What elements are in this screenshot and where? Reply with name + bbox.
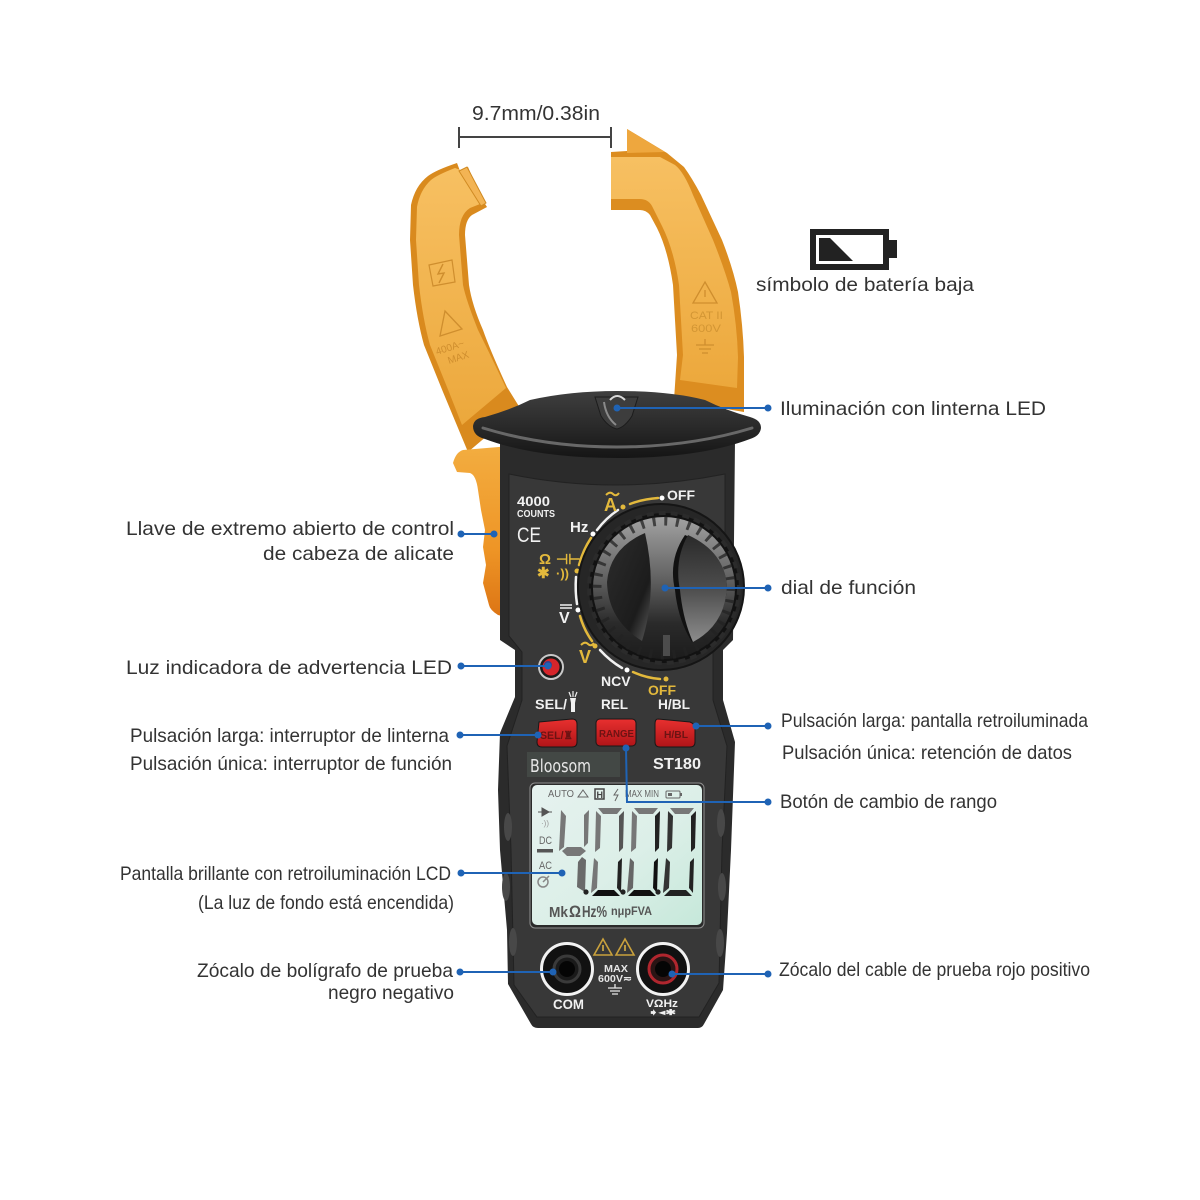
callout: negative socket: negro negativo: [328, 982, 454, 1004]
button: RANGE: RANGE: [599, 728, 634, 740]
button: H/BL: [655, 719, 695, 747]
LCD side indicators: ·)): [541, 819, 549, 828]
dial scale: OFF: [667, 487, 695, 503]
COM socket: COM: [553, 996, 584, 1012]
right clamp jaw: [611, 129, 744, 412]
button labels: REL: [601, 696, 628, 712]
callout: function dial: [662, 577, 916, 599]
LCD units row: [549, 902, 652, 921]
digit 0 third: [627, 808, 660, 896]
meter body: [498, 440, 735, 1028]
digit 0 fourth: [663, 808, 696, 896]
LCD side indicators: DC: [539, 835, 552, 847]
dial scale: Ω: [539, 551, 551, 568]
callout: clamp lever: [126, 518, 498, 565]
LCD status row: H: [596, 790, 603, 800]
callout: LCD screen: [120, 863, 566, 914]
callout: SEL button: Pulsación larga: interruptor de linterna: [130, 725, 449, 747]
callout: range button: [622, 744, 997, 813]
COM socket: [542, 944, 592, 1012]
dimension: jaw opening: [459, 103, 611, 148]
dial scale: OFF: [648, 682, 676, 698]
callout: SEL button: [130, 725, 542, 775]
brand plate: [527, 752, 620, 777]
button: RANGE: [596, 719, 636, 746]
LCD side indicators: AC: [539, 860, 552, 872]
LCD screen: [530, 783, 704, 928]
LCD side indicators: [537, 808, 553, 887]
callout: H/BL button: Pulsación única: retención de datos: [782, 742, 1072, 764]
LCD units row: Mk: [549, 904, 569, 921]
LCD digits 4.000: [559, 808, 696, 896]
jaw marking: 400A max: 400A~: [435, 338, 466, 358]
dial left grip: [607, 533, 651, 641]
left clamp jaw: [410, 163, 520, 452]
dial scale: A: [604, 495, 617, 515]
4000 counts label: [517, 493, 555, 520]
jaw marking: CAT II 600V: CAT II: [690, 310, 723, 322]
max voltage label: 600V≂: [598, 973, 632, 985]
dial scale: ·)): [556, 566, 569, 581]
jaw marking: 400A max: MAX: [447, 350, 471, 367]
label: low battery symbol: símbolo de batería baja: [756, 274, 974, 296]
dial scale: ⊣⊢: [556, 551, 580, 567]
dial scale: V: [579, 647, 591, 667]
jaw marking: lightning: [429, 260, 455, 286]
callout: SEL button: Pulsación única: interruptor de función: [130, 753, 452, 775]
positive socket: VΩHz: [646, 998, 679, 1010]
4000 counts label: COUNTS: [517, 509, 555, 520]
dial scale: NCV: [601, 673, 631, 689]
jaw marking: CAT II 600V: [690, 310, 723, 335]
callout: positive socket: [668, 959, 1090, 981]
jaw marking: 400A max: [435, 311, 471, 367]
digit 0 second: [591, 808, 624, 896]
LED flashlight: [595, 396, 638, 429]
callout: range button: Botón de cambio de rango: [780, 791, 997, 813]
dial scale: V: [559, 610, 570, 627]
button: H/BL: H/BL: [664, 729, 689, 741]
warning LED: [539, 655, 563, 679]
callout: warning LED: Luz indicadora de advertencia LED: [126, 657, 452, 679]
positive socket: ➧◂✱: [648, 1008, 676, 1017]
button: SEL flashlight: [537, 719, 577, 747]
callout: LCD screen: Pantalla brillante con retroiluminación LCD: [120, 863, 451, 885]
positive socket: [638, 944, 688, 1017]
callout: positive socket: Zócalo del cable de prueba rojo positivo: [779, 959, 1090, 981]
rear trigger grip: [453, 446, 510, 618]
callout: negative socket: Zócalo de bolígrafo de prueba: [197, 960, 453, 982]
CE mark: CE: [517, 524, 541, 547]
callout: LCD screen: (La luz de fondo está encendida): [198, 892, 454, 914]
LCD units row: nμpFVA: [611, 904, 652, 918]
dial scale: Hz: [570, 519, 588, 536]
low battery icon: [813, 232, 897, 267]
warning triangles: [594, 939, 634, 955]
LCD status row: AUTO: [548, 788, 574, 800]
jaw marking: CAT II 600V: 600V: [691, 323, 722, 335]
4000 counts label: 4000: [517, 493, 550, 509]
callout: clamp lever: de cabeza de alicate: [263, 543, 454, 565]
LCD status row: [548, 788, 682, 801]
callout: clamp lever: Llave de extremo abierto de control: [126, 518, 454, 540]
max voltage label: [598, 963, 632, 994]
callout: negative socket: [197, 960, 556, 1004]
dimension: jaw opening: 9.7mm/0.38in: [472, 103, 600, 125]
callout: H/BL button: [692, 710, 1088, 764]
callout: function dial: dial de función: [781, 577, 916, 599]
dial scale: ✱: [537, 565, 550, 582]
model name: ST180: [653, 756, 701, 773]
LCD status row: MAX MIN: [625, 789, 659, 800]
dial right grip: [673, 535, 727, 642]
callout: H/BL button: Pulsación larga: pantalla retroiluminada: [781, 710, 1088, 732]
digit 4: [559, 810, 589, 892]
jaw marking: warning: [693, 282, 717, 353]
button labels: H/BL: [658, 696, 690, 712]
LCD units row: Ω: [569, 902, 581, 921]
button labels: [535, 691, 690, 712]
max voltage label: MAX: [604, 963, 628, 975]
callout: LED flashlight: Iluminación con linterna LED: [780, 398, 1046, 420]
dial scale: [537, 487, 695, 698]
meter head: [473, 391, 761, 458]
brand plate: Bloosom: [530, 756, 591, 777]
function dial: [578, 504, 744, 670]
button: SEL flashlight: SEL/♜: [540, 730, 573, 742]
callout: LED flashlight: [614, 398, 1046, 420]
LCD units row: Hz%: [582, 904, 607, 921]
button labels: SEL/: [535, 696, 567, 712]
